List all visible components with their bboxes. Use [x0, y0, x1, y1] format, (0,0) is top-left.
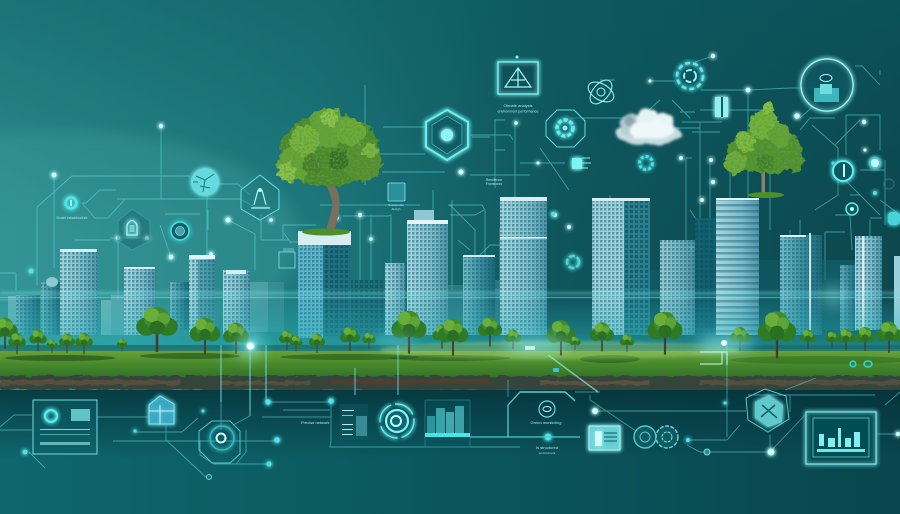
building [463, 255, 495, 335]
panel outline [470, 392, 580, 437]
nodes: underground [23, 343, 900, 480]
row of small trees [0, 307, 900, 358]
icon: atom [585, 76, 617, 108]
icon: globe left [191, 168, 219, 196]
icon: triangle panel with caption: Climate analysis [503, 103, 533, 108]
icon: ring with label: Is structured [536, 445, 558, 450]
building [894, 256, 900, 332]
caption: underground: Precise network [301, 420, 329, 425]
icon: hexagon person [241, 175, 279, 220]
icon: gear below cloud [640, 156, 652, 170]
big tree [277, 108, 381, 236]
icon: gear ring top [677, 63, 703, 89]
icon: house [149, 396, 174, 424]
panel: dashboard left [33, 400, 97, 454]
icon: cloud [615, 108, 681, 145]
icon: gear mid [567, 256, 579, 268]
building [500, 197, 547, 335]
icon: edge panel right [888, 212, 900, 225]
document [340, 404, 368, 440]
icon: triangle panel with caption [498, 56, 538, 114]
flares [237, 284, 845, 359]
icon: ring with label: environment [539, 451, 555, 455]
circuit lines: underground [0, 340, 900, 480]
caption: left of octagon: Framework [486, 182, 503, 186]
building [592, 198, 650, 335]
icon: triangle panel with caption: environment performance [498, 110, 538, 114]
icon: double ring [634, 426, 678, 448]
building [716, 198, 759, 335]
skyline front buildings [60, 197, 900, 338]
icon: shield hexagon [118, 209, 150, 250]
building [124, 267, 155, 335]
building [223, 270, 250, 335]
building [855, 236, 882, 330]
icon: small ring with label: Smart infrastructure [56, 216, 88, 220]
horizontal light band [0, 292, 900, 299]
icon: large ring city [801, 59, 853, 111]
underground panel [0, 390, 900, 514]
skyline back layer [8, 218, 858, 335]
building [780, 233, 822, 335]
nodes: sky [29, 54, 877, 289]
icon: target ring [380, 404, 414, 438]
caption: left of octagon: Resilience [486, 178, 502, 182]
building [60, 249, 97, 335]
soil edge [0, 376, 900, 390]
building: main with tree [298, 231, 351, 338]
right tree [724, 103, 805, 198]
building [660, 240, 695, 335]
chart panel [425, 400, 470, 447]
icon: report card [589, 426, 620, 450]
icon: doc with caption: Sustainable [388, 203, 404, 207]
building [407, 210, 448, 335]
building [189, 255, 215, 335]
icon: ring right [833, 161, 853, 181]
icon: ring with label: Green monitoring [531, 420, 561, 425]
icon: large hexagon [426, 110, 468, 160]
caption: left of octagon [486, 178, 503, 186]
icon: sign board [715, 97, 728, 117]
icon: small ring with label [56, 198, 88, 220]
icon: ring node [199, 421, 240, 463]
icon: glowing hexagon [746, 389, 789, 432]
icon: ring with label [531, 401, 561, 455]
icon: doc with caption [388, 183, 405, 211]
panel: right dashboard [806, 412, 876, 464]
lines on ground [221, 345, 727, 416]
grass [0, 341, 900, 381]
icon: lock [572, 158, 591, 169]
building [385, 263, 405, 335]
building low fade [0, 240, 900, 345]
icon: dot ring small [846, 158, 894, 215]
icon: octagon gear [546, 110, 585, 147]
icon: ring [171, 222, 189, 240]
icon: doc with caption: design [392, 207, 401, 211]
circuit lines: sky [0, 56, 900, 330]
icon: small monitor [279, 248, 295, 268]
